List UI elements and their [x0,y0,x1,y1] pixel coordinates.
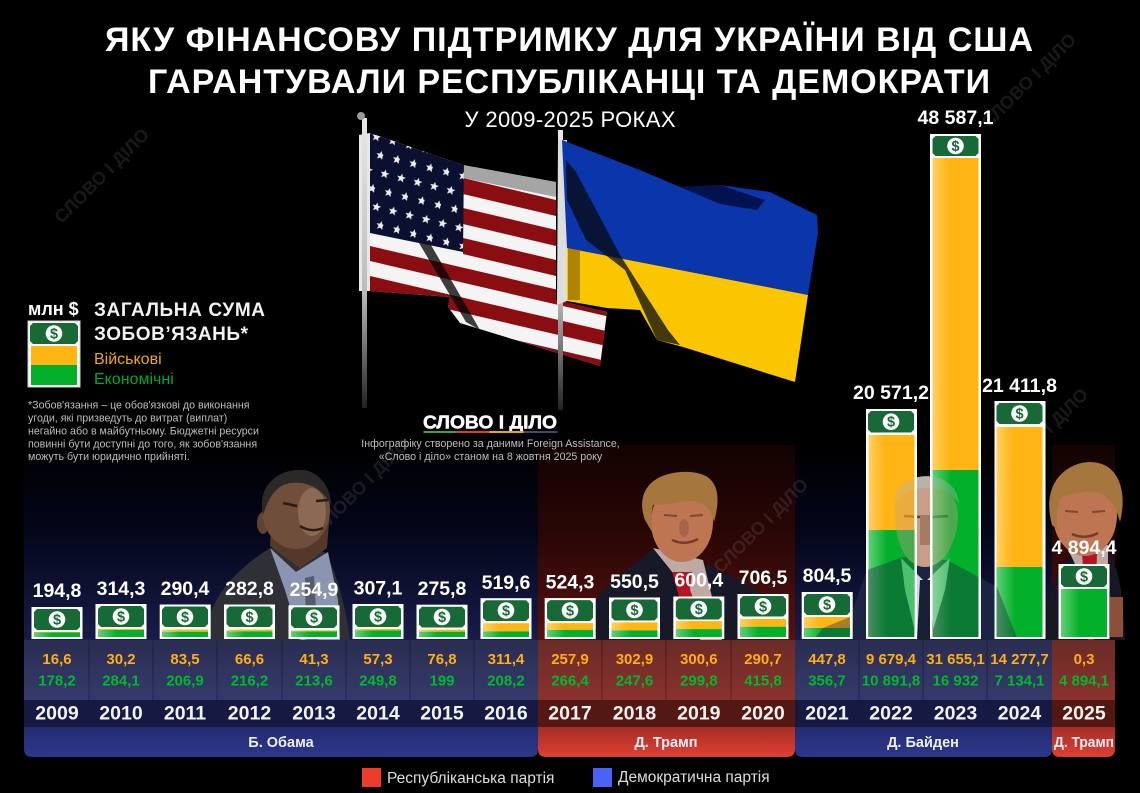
column: 2010: 30,2 [106,651,136,668]
column: 2019: 600,4 [674,570,723,592]
column: 2022: 2022 [869,702,913,724]
column: 2022: $ [887,415,895,431]
column: 2021: $ [823,598,831,614]
panel: Biden term background [795,445,1052,640]
column: 2013: 213,6 [295,672,333,690]
overlay: Biden portrait through bars [813,476,1018,640]
column: 2016: 311,4 [488,651,525,668]
column: 2020: 2020 [741,702,785,724]
column: 2014: $ [374,610,382,626]
band: Obama data rows: Б. Обама [248,735,315,751]
column: 2024: 21 411,8 [982,375,1057,397]
band: Biden data rows [795,640,1052,757]
column: 2022: 20 571,2 [853,382,929,404]
column: 2025: 0,3 [1074,651,1094,668]
column: 2014 [352,578,404,724]
watermarks [50,29,1092,577]
column: 2024: $ [1015,406,1024,422]
column: 2023: 2023 [934,702,977,724]
column: 2013: 254,9 [290,579,339,601]
photo: Donald Trump [580,472,772,640]
column: 2024 [982,375,1057,724]
column: 2016: 2016 [484,702,528,724]
column: 2015 [416,578,468,724]
column: 2017: 2017 [548,702,592,724]
band: Trump 2025 data rows [1052,640,1115,757]
source note [361,438,620,463]
column: 2020: 290,7 [744,651,782,668]
column: 2015: 76,8 [427,651,457,668]
column: 2023: 16 932 [933,672,978,690]
column: 2010: 284,1 [102,672,140,690]
column: 2012: 2012 [228,702,271,724]
column: 2017: 524,3 [546,572,595,594]
column: 2009: 178,2 [38,672,76,690]
legend: $ [50,326,58,342]
column: 2017: $ [566,604,574,620]
column: 2021: 2021 [805,702,849,724]
column: 2013: 41,3 [299,651,329,668]
column: 2013: $ [310,611,318,627]
band: Obama data rows [24,640,538,757]
party legend: Republican: Республіканська партія [387,770,554,787]
column: 2017: 257,9 [551,651,589,668]
column: 2018: 302,9 [616,651,653,668]
column: 2014: 307,1 [354,578,403,600]
watermarks: СЛОВО І ДІЛО [977,29,1080,132]
watermarks: СЛОВО І ДІЛО [571,206,674,309]
column: 2025: 4 894,4 [1051,537,1117,559]
column: 2014: 249,8 [359,672,397,690]
column: 2011: $ [181,610,189,626]
column: 2010 [96,578,146,724]
column: 2009: 16,6 [42,651,72,668]
column: 2016: $ [502,604,510,620]
photo: Ukrainian flag [557,130,818,410]
column: 2016 [480,572,532,724]
logo: СЛОВО І ДІЛО [423,412,557,432]
column: 2014: 2014 [356,702,400,724]
column: 2023: $ [951,139,960,155]
column: 2018: 247,6 [616,672,653,690]
column: 2017: 266,4 [551,672,589,690]
footnote [28,400,259,463]
column: 2015: $ [438,610,446,626]
footnote: можуть бути юридично прийняті. [28,451,190,463]
watermarks: СЛОВО І ДІЛО [989,384,1092,487]
footnote: негайно або в майбутньому. Бюджетні ресурси [28,426,259,438]
column: 2013 [288,579,340,724]
column: 2011: 2011 [164,702,206,724]
column: 2021 [802,565,853,724]
legend: ЗАГАЛЬНА СУМА [94,300,265,321]
photo: American flag [357,112,620,408]
column: 2023 [918,107,994,724]
panel: Trump term background [538,445,795,640]
column: 2024: 7 134,1 [994,672,1045,690]
column: 2023: 31 655,1 [926,651,985,668]
column: 2019: 299,8 [680,672,718,690]
column: 2011: 206,9 [166,672,204,690]
title: ЯКУ ФІНАНСОВУ ПІДТРИМКУ ДЛЯ УКРАЇНИ ВІД США [105,21,1033,59]
column: 2019: $ [695,602,703,618]
column: 2013: 2013 [292,702,336,724]
column: 2009: 2009 [35,702,79,724]
party legend: Democratic: Демократична партія [618,769,770,786]
band: Trump 2025 data rows: Д. Трамп [1054,735,1114,751]
column: 2019: 300,6 [680,651,718,668]
column: 2011 [160,578,211,724]
source note: Інфографіку створено за даними Foreign Assistance, [361,438,620,450]
watermarks: СЛОВО І ДІЛО [50,124,153,227]
column: 2009 [32,580,82,724]
column: 2021: 804,5 [803,565,852,587]
column: 2012: 66,6 [235,651,264,668]
column: 2024: 2024 [998,702,1041,724]
column: 2016: 519,6 [482,572,531,594]
column: 2018: $ [630,603,639,619]
watermarks: СЛОВО І ДІЛО [709,474,812,577]
footnote: *Зобов'язання – це обов'язкові до виконання [28,400,250,412]
footnote: повинні бути доступні до того, як зобов'язання [28,438,257,450]
footnote: угоди, які призведуть до витрат (виплат) [28,412,227,424]
column: 2017 [545,572,596,724]
legend: Економічні [94,371,174,388]
column: 2012 [224,578,275,724]
subtitle: У 2009-2025 РОКАХ [464,107,676,132]
column: 2024: 14 277,7 [990,651,1049,668]
column: 2010: 2010 [99,702,143,724]
column: 2015: 199 [429,672,455,690]
column: 2015: 2015 [420,702,464,724]
band: Trump data rows [538,640,795,757]
panel: Obama term background [24,445,538,640]
photo: Joe Biden [813,476,1018,640]
legend [28,299,265,388]
band: Trump data rows: Д. Трамп [634,735,698,751]
column: 2021: 356,7 [808,672,846,690]
column: 2022 [853,382,929,724]
title [105,21,1033,101]
legend: млн $ [28,299,79,319]
column: 2012: 216,2 [231,672,268,690]
panel: Trump 2025 background [1052,445,1115,640]
column: 2020: 415,8 [744,672,782,690]
column: 2020: $ [759,599,767,615]
legend: Військові [94,351,162,368]
column: 2025: 4 894,1 [1059,672,1109,690]
column: 2011: 83,5 [170,651,200,668]
column: 2023: 48 587,1 [918,107,994,129]
column: 2009: 194,8 [33,580,82,602]
column: 2021: 447,8 [808,651,846,668]
column: 2022: 10 891,8 [862,672,920,690]
legend: ЗОБОВ’ЯЗАНЬ* [94,324,249,345]
band: Biden data rows: Д. Байден [887,735,959,751]
watermarks: СЛОВО І ДІЛО [310,434,413,537]
column: 2011: 290,4 [161,578,210,600]
column: 2016: 208,2 [487,672,525,690]
column: 2019: 2019 [677,702,721,724]
column: 2009: $ [53,612,61,628]
title: ГАРАНТУВАЛИ РЕСПУБЛІКАНЦІ ТА ДЕМОКРАТИ [148,63,990,101]
column: 2022: 9 679,4 [866,651,917,668]
photo: Barack Obama [205,470,350,640]
column: 2018: 2018 [613,702,656,724]
column: 2010: 314,3 [97,578,146,600]
column: 2012: $ [245,610,254,626]
source note: «Слово і діло» станом на 8 жовтня 2025 року [379,451,603,463]
column: 2012: 282,8 [225,578,274,600]
column: 2018: 550,5 [610,571,659,593]
column: 2020 [738,567,788,724]
column: 2014: 57,3 [363,651,393,668]
column: 2025 [1051,537,1117,724]
column: 2018 [609,571,660,724]
photo: Donald Trump 2025 [1040,462,1125,640]
column: 2025: $ [1080,570,1088,586]
column: 2015: 275,8 [418,578,467,600]
column: 2025: 2025 [1062,702,1106,724]
column: 2020: 706,5 [739,567,788,589]
column: 2019 [673,570,724,724]
column: 2010: $ [117,610,125,626]
